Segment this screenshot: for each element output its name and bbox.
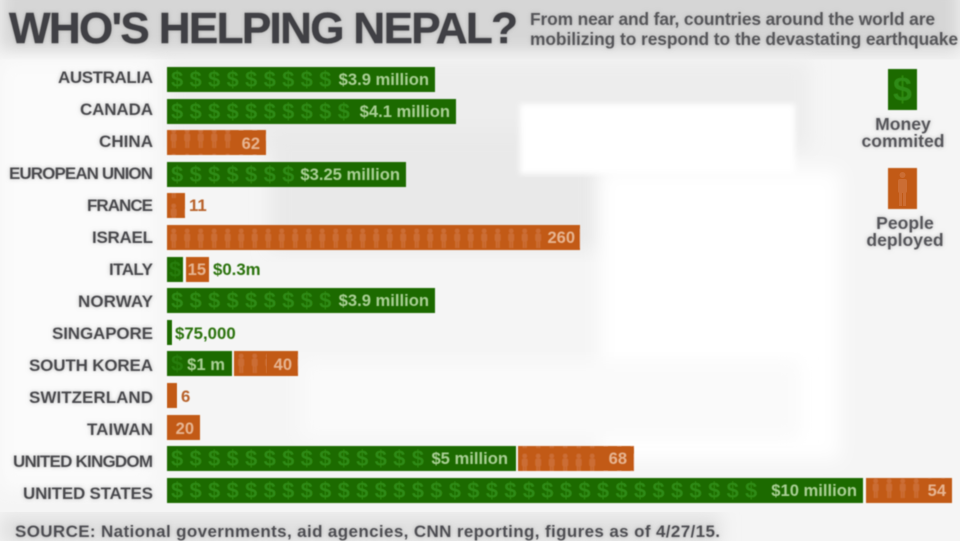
row: Australia: AUSTRALIA [58,68,153,87]
row: United States [23,478,952,503]
subtitle: mobilizing to respond to the devastating earthquake [530,29,958,49]
row: Switzerland: SWITZERLAND [29,388,153,407]
row: Italy: $0.3m [213,260,261,279]
legend: money committed: Money [875,114,931,134]
subtitle: From near and far, countries around the world are [530,9,935,29]
row: European Union: $3.25 million [300,165,400,184]
row: South Korea: SOUTH KOREA [29,356,153,375]
row: Israel: ISRAEL [92,228,153,247]
row: Taiwan: TAIWAN [87,420,153,439]
source note: SOURCE: National governments, aid agencies, CNN reporting, figures as of 4/27/15. [15,522,720,541]
row: South Korea [29,351,298,376]
row: Canada: $$$$$$$$$$ [171,99,356,124]
row: United Kingdom: UNITED KINGDOM [13,452,153,471]
legend: people deployed: People [876,213,934,233]
row: United States: UNITED STATES [23,484,153,503]
title: WHO'S HELPING NEPAL? [9,4,518,53]
row: United States: $10 million [771,481,857,500]
row: Australia [58,67,435,92]
row: France [87,193,207,218]
row: Norway: $3.9 million [339,291,429,310]
row: United States: $$$$$$$$$$$$$$$$$$$$$$$$$$$$$$$$ [171,478,764,503]
row: China: 62 [242,135,260,153]
row: European Union [9,162,406,187]
row: Canada: $4.1 million [360,102,450,121]
row: Norway: $$$$$$$$$ [171,288,338,313]
row: Singapore: $75,000 [175,324,236,343]
row: European Union: EUROPEAN UNION [9,164,153,183]
row: Canada: CANADA [80,100,153,119]
row: Singapore [52,320,236,345]
row: United States: 54 [928,482,947,500]
row: United Kingdom: 68 [609,450,627,468]
row: South Korea: 40 [274,356,292,374]
legend: money committed [861,69,945,151]
row: Italy: ITALY [109,260,154,279]
row: Italy: 15 [188,261,206,279]
row: Canada [80,99,456,124]
row: Israel [92,225,580,250]
row: Norway [78,288,435,313]
legend: people deployed [866,168,944,250]
row: South Korea: $1 m [187,355,225,374]
legend: money committed: $ [893,71,912,109]
row: Australia: $$$$$$$$$ [171,67,338,92]
row: France: 11 [189,196,207,215]
legend: money committed: commited [861,131,945,151]
row: Singapore: SINGAPORE [52,324,153,343]
row: European Union: $$$$$$$ [171,162,301,187]
row: Norway: NORWAY [78,292,154,311]
row: United Kingdom: $5 million [431,449,508,468]
row: China [99,130,266,155]
row: South Korea: $ [171,351,190,376]
row: Israel: 260 [547,229,575,247]
row: Taiwan: 20 [176,420,194,438]
row: Australia: $3.9 million [339,70,429,89]
row: United Kingdom: $$$$$$$$$$$$$$ [171,446,430,471]
row: Switzerland: 6 [181,387,190,406]
row: Italy: $ [169,257,188,282]
row: United Kingdom [13,446,634,471]
legend: people deployed: deployed [866,230,944,250]
row: Taiwan [87,415,200,440]
row: France: FRANCE [87,196,153,215]
row: Switzerland [29,383,190,408]
row: China: CHINA [99,132,153,151]
row: Italy [109,257,261,282]
